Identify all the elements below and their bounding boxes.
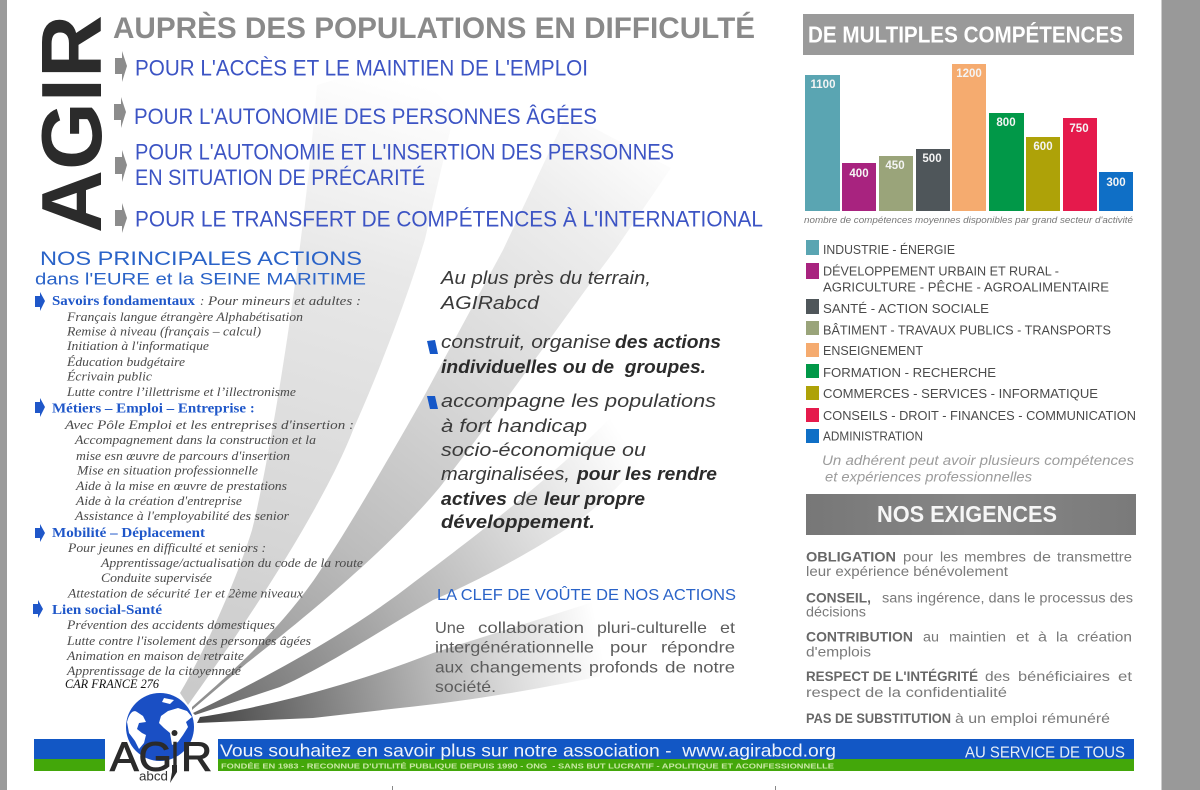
point: accompagne: de xyxy=(513,489,538,509)
requirement: obligation: membres xyxy=(964,550,1026,565)
section: lien social: Lien social-Santé xyxy=(52,603,162,618)
text: collaboration: notre xyxy=(693,660,735,677)
section: savoirs fondamentaux: Éducation budgétaire xyxy=(66,354,185,369)
requirement: obligation: transmettre xyxy=(1057,550,1132,565)
bar: 500 xyxy=(916,149,950,211)
section: lien social: CAR FRANCE 276 xyxy=(65,676,159,691)
legend note: et expériences professionnelles xyxy=(825,470,1032,485)
icon: blue arrow xyxy=(35,398,45,417)
section: savoirs fondamentaux: Lutte contre l’illettrisme et l’illectronisme xyxy=(66,384,296,399)
heading: de multiples compétences: DE MULTIPLES COMPÉTENCES xyxy=(808,21,1123,48)
point: accompagne: marginalisées, xyxy=(441,464,570,484)
actions list xyxy=(33,292,363,691)
goal: emploi: POUR L'ACCÈS ET LE MAINTIEN DE L'EMPLOI xyxy=(135,56,588,80)
chart caption: nombre de compétences moyennes disponibles par grand secteur d'activité xyxy=(804,215,1133,225)
text: collaboration: profonds xyxy=(589,660,658,677)
section: savoirs fondamentaux: Pour mineurs et adultes : xyxy=(207,293,361,308)
requirement: obligation: de xyxy=(1033,550,1051,565)
section: savoirs fondamentaux xyxy=(52,293,361,399)
bar: 800: 800 xyxy=(996,117,1016,129)
requirement: contribution: CONTRIBUTION xyxy=(806,630,913,645)
requirement: substitution xyxy=(806,711,1110,726)
section: savoirs fondamentaux: Initiation à l'informatique xyxy=(66,338,209,353)
intro: Au plus près du terrain, xyxy=(440,268,651,288)
requirement: conseil xyxy=(806,590,1133,620)
main heading: AUPRÈS DES POPULATIONS EN DIFFICULTÉ xyxy=(113,11,755,45)
requirement: respect: des xyxy=(985,669,1010,684)
bar: 450: 450 xyxy=(885,160,905,172)
requirement: substitution: PAS DE SUBSTITUTION xyxy=(806,711,951,726)
requirement: substitution: à un emploi rémunéré xyxy=(955,711,1110,726)
requirement: respect: RESPECT DE L'INTÉGRITÉ xyxy=(806,669,978,684)
icon: blue arrow xyxy=(35,524,45,542)
point: construit xyxy=(441,332,721,377)
requirement: conseil: sans ingérence, dans le processus des xyxy=(882,590,1133,605)
legend item: santé: SANTÉ - ACTION SOCIALE xyxy=(823,301,989,316)
section: mobilité: Mobilité – Déplacement xyxy=(52,526,205,541)
goal: international: POUR LE TRANSFERT DE COMPÉTENCES À L'INTERNATIONAL xyxy=(135,206,763,232)
requirement: obligation: leur expérience bénévolement xyxy=(806,564,1008,579)
section: mobilité: Apprentissage/actualisation du code de la route xyxy=(100,555,363,570)
heading: de multiples compétences xyxy=(803,14,1134,55)
goal: précarité: POUR L'AUTONOMIE ET L'INSERTION DES PERSONNES xyxy=(135,140,674,164)
section: mobilité xyxy=(52,526,363,601)
requirement: contribution xyxy=(806,630,1132,660)
icon: blue arrow xyxy=(35,292,45,311)
heading: nos principales actions xyxy=(35,249,366,289)
bar: 500: 500 xyxy=(922,153,942,165)
requirement: obligation xyxy=(806,550,1132,579)
bar: 400: 400 xyxy=(849,168,869,180)
footer slogan: AU SERVICE DE TOUS xyxy=(965,744,1125,762)
bar: 400 xyxy=(842,163,876,211)
heading: nos exigences: NOS EXIGENCES xyxy=(877,501,1057,527)
heading: nos principales actions: NOS PRINCIPALES ACTIONS xyxy=(40,249,362,270)
section: métiers: Assistance à l'employabilité des senior xyxy=(74,508,290,523)
section: métiers: mise esn œuvre de parcours d'insertion xyxy=(76,448,290,463)
goal: personnes âgées: POUR L'AUTONOMIE DES PERSONNES ÂGÉES xyxy=(134,104,597,129)
point: accompagne: accompagne les populations xyxy=(441,391,716,411)
section: lien social: Lutte contre l'isolement des personnes âgées xyxy=(66,633,311,648)
point: accompagne: actives xyxy=(441,489,507,509)
bar chart xyxy=(805,64,1133,211)
requirement: obligation: les xyxy=(940,550,958,565)
logo AGIR abcd xyxy=(110,693,212,784)
icon: grey arrow 2 xyxy=(114,97,126,128)
requirements list xyxy=(806,550,1133,726)
requirement: obligation: pour xyxy=(903,550,934,565)
point: accompagne: développement. xyxy=(441,512,595,532)
logo wordmark: I xyxy=(171,734,179,780)
vertical title AGIR: AGIR xyxy=(25,15,120,233)
section: métiers xyxy=(52,402,354,523)
logo wordmark: R xyxy=(181,734,212,780)
requirement: conseil: CONSEIL, xyxy=(806,590,871,605)
icon: grey arrow 4 xyxy=(115,203,127,233)
section: métiers: Aide à la création d'entreprise xyxy=(75,493,242,508)
text: collaboration: changements xyxy=(470,660,582,677)
legend item: conseils: CONSEILS - DROIT - FINANCES - COMMUNICATION xyxy=(823,408,1136,423)
bar: 1100 xyxy=(805,75,840,211)
legend item: formation: FORMATION - RECHERCHE xyxy=(823,365,996,380)
requirement: contribution: à xyxy=(1038,630,1048,645)
bar: 800 xyxy=(989,113,1024,211)
requirement: respect: respect de la confidentialité xyxy=(806,685,1007,700)
point: accompagne xyxy=(441,391,717,532)
text: collaboration: et xyxy=(720,620,736,637)
legend item: industrie: INDUSTRIE - ÉNERGIE xyxy=(823,242,955,257)
footer band xyxy=(218,739,1134,771)
rays from the globe xyxy=(180,60,671,723)
bar: 750 xyxy=(1063,118,1097,211)
bar: 1100: 1100 xyxy=(811,79,835,91)
section: mobilité: Conduite supervisée xyxy=(101,570,212,585)
requirement: respect: bénéficiaires xyxy=(1018,669,1110,684)
requirement: contribution: la xyxy=(1056,630,1069,645)
point: construit: individuelles ou de groupes. xyxy=(441,357,706,377)
text: collaboration xyxy=(435,620,736,696)
section: savoirs fondamentaux: Écrivain public xyxy=(66,369,152,384)
section: lien social: Prévention des accidents domestiques xyxy=(66,617,275,632)
logo wordmark: AG xyxy=(110,734,172,780)
icon: blue bullet xyxy=(427,396,438,409)
section: savoirs fondamentaux: Savoirs fondamentaux xyxy=(52,294,195,309)
logo wordmark xyxy=(110,730,212,784)
text: collaboration: collaboration xyxy=(478,620,584,637)
point: accompagne: à fort handicap xyxy=(441,416,587,436)
requirement: conseil: décisions xyxy=(806,605,866,620)
section: métiers: Mise en situation professionnelle xyxy=(76,463,258,478)
legend note: Un adhérent peut avoir plusieurs compétences xyxy=(822,453,1134,468)
heading: nos exigences xyxy=(806,494,1136,535)
central text block xyxy=(427,268,721,532)
requirement: contribution: et xyxy=(1016,630,1029,645)
section: mobilité: Pour jeunes en difficulté et seniors : xyxy=(67,540,266,555)
heading: la clef de voûte: LA CLEF DE VOÛTE DE NOS ACTIONS xyxy=(437,585,736,604)
heading: nos principales actions: dans l'EURE et la SEINE MARITIME xyxy=(35,271,366,289)
bar: 300: 300 xyxy=(1106,177,1126,189)
intro xyxy=(440,268,651,313)
requirement: contribution: création xyxy=(1077,630,1132,645)
bar: 600: 600 xyxy=(1033,141,1053,153)
bar: 450 xyxy=(879,156,913,211)
legend item: développement: DÉVELOPPEMENT URBAIN ET RURAL - xyxy=(823,264,1059,279)
legend item: administration: ADMINISTRATION xyxy=(823,429,923,444)
legend xyxy=(806,240,1136,444)
point: accompagne: leur propre xyxy=(544,489,645,509)
legend item: développement: AGRICULTURE - PÊCHE - AGROALIMENTAIRE xyxy=(823,280,1109,295)
section: métiers: Accompagnement dans la construction et la xyxy=(74,432,317,447)
section: savoirs fondamentaux: Remise à niveau (français – calcul) xyxy=(66,324,261,338)
icon: blue arrow xyxy=(33,600,43,618)
bar: 600 xyxy=(1026,137,1060,211)
point: construit: des actions xyxy=(615,332,721,352)
text: collaboration: aux xyxy=(435,660,463,677)
intro: AGIRabcd xyxy=(440,293,540,313)
logo wordmark: abcd xyxy=(139,769,168,784)
section: lien social: Apprentissage de la citoyenneté xyxy=(66,663,242,678)
text: collaboration: société. xyxy=(435,679,496,696)
footer band left xyxy=(34,739,105,771)
legend item: enseignement: ENSEIGNEMENT xyxy=(823,343,923,358)
text: collaboration: pluri-culturelle xyxy=(597,620,707,637)
icon: grey arrow 1 xyxy=(115,51,127,82)
bar: 1200 xyxy=(952,64,986,211)
section: mobilité: Attestation de sécurité 1er et 2ème niveaux xyxy=(67,586,303,601)
requirement: contribution: d'emplois xyxy=(806,645,871,660)
text: collaboration: pour xyxy=(610,640,648,657)
goal: précarité: EN SITUATION DE PRÉCARITÉ xyxy=(135,165,425,190)
bar: 750: 750 xyxy=(1069,123,1089,135)
text: collaboration: de xyxy=(665,660,686,677)
requirement: contribution: maintien xyxy=(949,630,1006,645)
section: métiers: Métiers – Emploi – Entreprise xyxy=(52,402,246,417)
section: métiers: Aide à la mise en œuvre de prestations xyxy=(75,478,287,493)
requirement: respect xyxy=(806,669,1132,700)
legend item: bâtiment: BÂTIMENT - TRAVAUX PUBLICS - TRANSPORTS xyxy=(823,323,1111,338)
section: métiers: Avec Pôle Emploi et les entreprises d'insertion : xyxy=(64,417,354,432)
legend item: développement xyxy=(806,263,1109,295)
legend item: commerces: COMMERCES - SERVICES - INFORMATIQUE xyxy=(823,386,1098,401)
requirement: obligation: OBLIGATION xyxy=(806,550,896,565)
bar: 1200: 1200 xyxy=(956,68,982,80)
section: métiers: : xyxy=(250,402,255,417)
requirement: respect: et xyxy=(1118,669,1132,684)
text: collaboration: Une xyxy=(435,620,465,637)
goal: précarité xyxy=(135,140,674,190)
goals list xyxy=(114,51,763,233)
legend note xyxy=(822,453,1134,485)
point: construit: construit, organise xyxy=(441,332,611,352)
text: collaboration: répondre xyxy=(661,640,735,657)
section: savoirs fondamentaux: Français langue étrangère Alphabétisation xyxy=(66,309,303,324)
point: accompagne: pour les rendre xyxy=(576,464,717,484)
section: lien social: Animation en maison de retraite xyxy=(66,648,244,663)
section: savoirs fondamentaux: : xyxy=(200,293,204,308)
icon: globe xyxy=(126,693,194,761)
icon: grey arrow 3 xyxy=(115,150,127,182)
icon: blue bullet xyxy=(427,340,438,354)
text: collaboration: intergénérationnelle xyxy=(435,640,594,657)
section: lien social xyxy=(52,603,311,691)
footer contact text: Vous souhaitez en savoir plus sur notre association - www.agirabcd.org xyxy=(220,740,836,760)
point: accompagne: socio-économique ou xyxy=(441,440,646,460)
footer association details: FONDÉE EN 1983 - RECONNUE D'UTILITÉ PUBLIQUE DEPUIS 1990 - ONG - SANS BUT LUCRATIF - APOLITIQUE ET ACONFESSIONNELLE xyxy=(221,762,834,770)
requirement: contribution: au xyxy=(923,630,939,645)
bar: 300 xyxy=(1099,172,1133,211)
